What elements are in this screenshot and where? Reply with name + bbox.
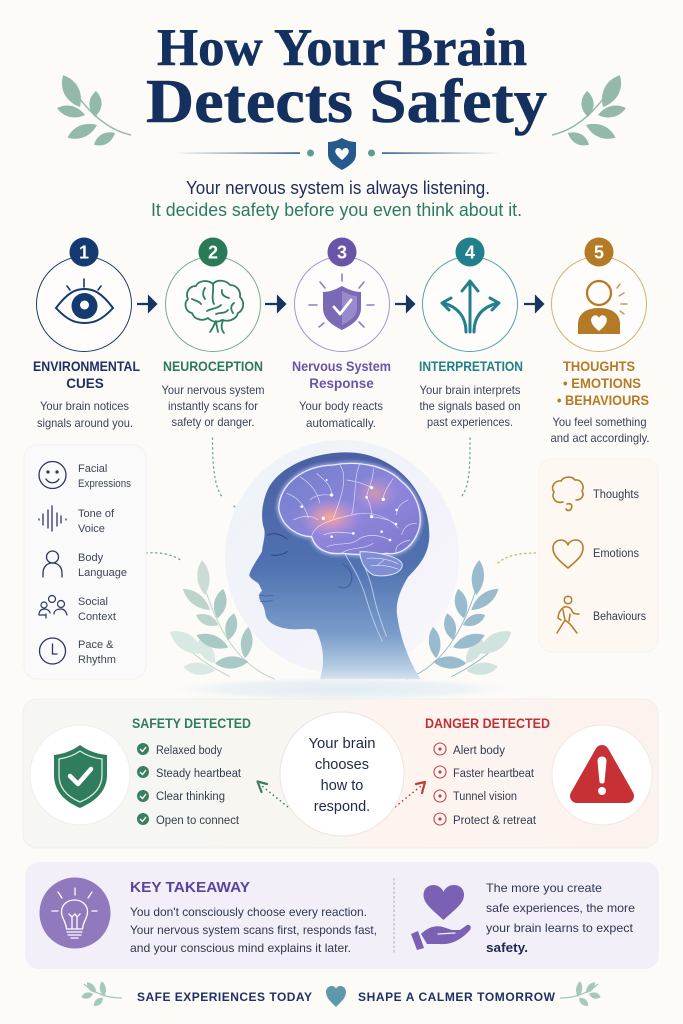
- text: thoughts: Thoughts: [593, 489, 639, 501]
- heading: danger detected: DANGER DETECTED: [425, 716, 550, 731]
- icon: footer heart: [326, 986, 346, 1007]
- description: Your body reacts: [299, 399, 383, 413]
- badge 2: [198, 238, 228, 266]
- heading: • EMOTIONS: [563, 376, 641, 391]
- callout: brain chooses: how to: [321, 778, 363, 794]
- description: Your brain notices: [40, 399, 129, 413]
- description: You feel something: [552, 415, 646, 429]
- icon: walking person: [557, 596, 579, 633]
- dotted connectors: [146, 438, 538, 563]
- list: safety signs: [137, 743, 242, 827]
- title: Detects Safety: [146, 68, 547, 136]
- description: signals around you.: [37, 416, 133, 430]
- heading: ENVIRONMENTAL: [33, 359, 140, 374]
- description: [162, 383, 265, 429]
- description: [299, 399, 383, 430]
- description: and act accordingly.: [550, 431, 650, 445]
- list: safety signs: Open to connect: [156, 815, 240, 827]
- subtitle: Your nervous system is always listening.: [186, 178, 490, 198]
- arrow 4 to 5: [524, 297, 543, 311]
- text: safe experiences today: SAFE EXPERIENCES TODAY: [137, 990, 312, 1004]
- icon: branching arrows: [442, 281, 499, 332]
- icon: clock: [40, 638, 66, 664]
- panel: safety vs danger: [23, 699, 658, 848]
- icon: group of people: [39, 596, 67, 618]
- title: How Your Brain: [157, 19, 527, 77]
- heading: CUES: [66, 376, 104, 391]
- description: past experiences.: [427, 415, 513, 429]
- arrow 1 to 2: [137, 297, 156, 311]
- text: body language: [78, 552, 127, 579]
- callout: brain chooses: chooses: [315, 757, 369, 773]
- icon: divider with shield: [174, 138, 500, 170]
- heading: Nervous System: [292, 359, 391, 374]
- text: safe experiences note: your brain learns to expect: [486, 921, 634, 935]
- description: automatically.: [306, 416, 376, 430]
- step 2: neuroception: [162, 238, 265, 429]
- illustration: head with glowing brain: [166, 440, 516, 701]
- heading: [557, 359, 649, 408]
- text: emotions: Emotions: [593, 548, 639, 560]
- list: safety signs: Clear thinking: [156, 791, 225, 803]
- heading: [292, 359, 391, 391]
- heading: NEUROCEPTION: [163, 359, 263, 374]
- arrow 3 to 4: [395, 297, 414, 311]
- icon: right laurel sprig: [552, 72, 627, 149]
- icon: person: [43, 551, 62, 577]
- list: safety signs: Relaxed body: [156, 745, 222, 757]
- badge 4: [456, 238, 484, 266]
- ground glow: [170, 677, 514, 701]
- step 3: nervous system response: [292, 238, 391, 430]
- badge 1: [70, 238, 98, 266]
- icon: eye: [56, 279, 113, 323]
- description: safety or danger.: [172, 415, 254, 429]
- icon: heart in hand: [411, 885, 471, 950]
- text: takeaway body: [130, 905, 377, 955]
- list: danger signs: Faster heartbeat: [453, 768, 535, 780]
- text: safe experiences note: safe experiences, the more: [486, 901, 635, 915]
- text: takeaway body: Your nervous system scans first, responds fast,: [130, 923, 377, 937]
- text: safe experiences note: The more you create: [486, 881, 602, 895]
- left laurel: [166, 560, 275, 679]
- right laurel: [406, 560, 516, 679]
- description: [37, 399, 133, 430]
- arrow: to danger: [395, 782, 425, 807]
- text: tone of voice: Tone of: [78, 508, 115, 520]
- text: shape a calmer tomorrow: SHAPE A CALMER TOMORROW: [358, 990, 556, 1004]
- text: facial expressions: Expressions: [78, 478, 131, 490]
- list: safety signs: Steady heartbeat: [156, 768, 242, 780]
- brain: [279, 463, 420, 576]
- description: the signals based on: [420, 399, 520, 413]
- badge 5: 5: [594, 242, 604, 262]
- badge 3: [328, 238, 356, 266]
- heading: Response: [309, 376, 374, 391]
- head silhouette: [249, 452, 429, 679]
- arrow 2 to 3: [265, 297, 285, 311]
- list: danger signs: Alert body: [453, 745, 505, 757]
- icon: left laurel sprig: [56, 72, 131, 149]
- text: safe experiences note: [486, 881, 635, 955]
- text: body language: Body: [78, 552, 104, 564]
- text: social context: Context: [78, 611, 116, 623]
- title: [146, 19, 547, 136]
- description: Your nervous system: [162, 383, 265, 397]
- heading: key takeaway: KEY TAKEAWAY: [130, 879, 250, 896]
- icon: brain outline: [185, 281, 243, 333]
- list: danger signs: Protect & retreat: [453, 815, 537, 827]
- badge 5: [584, 238, 614, 266]
- icon: left footer sprig: [81, 980, 122, 1008]
- arrow: to safety: [258, 782, 288, 807]
- text: social context: Social: [78, 596, 108, 608]
- text: takeaway body: and your conscious mind explains it later.: [130, 941, 351, 955]
- text: social context: [78, 596, 116, 623]
- icon: light bulb: [40, 878, 110, 948]
- heading: [33, 359, 140, 391]
- icon: person with heart: [578, 281, 627, 334]
- icon: right footer sprig: [560, 980, 601, 1008]
- callout: brain chooses: respond.: [314, 799, 370, 815]
- description: Your brain interprets: [420, 383, 520, 397]
- icon: sound wave: [39, 506, 66, 531]
- text: safe experiences note: safety.: [486, 941, 528, 955]
- text: tone of voice: [78, 508, 115, 535]
- badge 2: 2: [208, 242, 218, 262]
- panel: thoughts, emotions, behaviours list: [539, 459, 658, 652]
- panel: environmental cues list: [24, 445, 146, 679]
- text: facial expressions: [78, 463, 131, 490]
- text: pace and rhythm: Pace &: [78, 639, 114, 651]
- text: tone of voice: Voice: [78, 523, 105, 535]
- text: takeaway body: You don't consciously choose every reaction.: [130, 905, 367, 919]
- badge 4: 4: [465, 242, 475, 262]
- panel: key takeaway: [25, 862, 659, 969]
- text: behaviours: Behaviours: [593, 611, 646, 623]
- icon: shield with rays: [309, 274, 374, 330]
- heading: • BEHAVIOURS: [557, 393, 649, 408]
- icon: warning triangle circle: [552, 725, 652, 825]
- badge 3: 3: [337, 242, 347, 262]
- step 5: thoughts, emotions, behaviours: [550, 238, 650, 445]
- callout: brain chooses: Your brain: [308, 736, 376, 752]
- text: pace and rhythm: Rhythm: [78, 654, 116, 666]
- subtitle: It decides safety before you even think about it.: [151, 200, 522, 220]
- heading: safety detected: SAFETY DETECTED: [132, 716, 251, 731]
- heading: INTERPRETATION: [419, 359, 523, 374]
- icon: thought cloud: [553, 477, 583, 510]
- subtitle: [151, 178, 522, 220]
- text: facial expressions: Facial: [78, 463, 107, 475]
- text: pace and rhythm: [78, 639, 116, 666]
- list: danger signs: [434, 743, 537, 827]
- footer banner: [81, 980, 601, 1008]
- text: body language: Language: [78, 567, 127, 579]
- icon: green shield circle: [30, 725, 130, 825]
- description: instantly scans for: [168, 399, 258, 413]
- heading: THOUGHTS: [563, 359, 635, 374]
- step 4: interpretation: [419, 238, 523, 429]
- callout: brain chooses: [280, 712, 404, 836]
- description: [550, 415, 650, 445]
- icon: smiling face: [39, 462, 66, 488]
- list: danger signs: Tunnel vision: [453, 791, 517, 803]
- badge 1: 1: [79, 242, 89, 262]
- description: [420, 383, 520, 429]
- icon: heart outline: [553, 540, 583, 568]
- step 1: environmental cues: [33, 238, 140, 430]
